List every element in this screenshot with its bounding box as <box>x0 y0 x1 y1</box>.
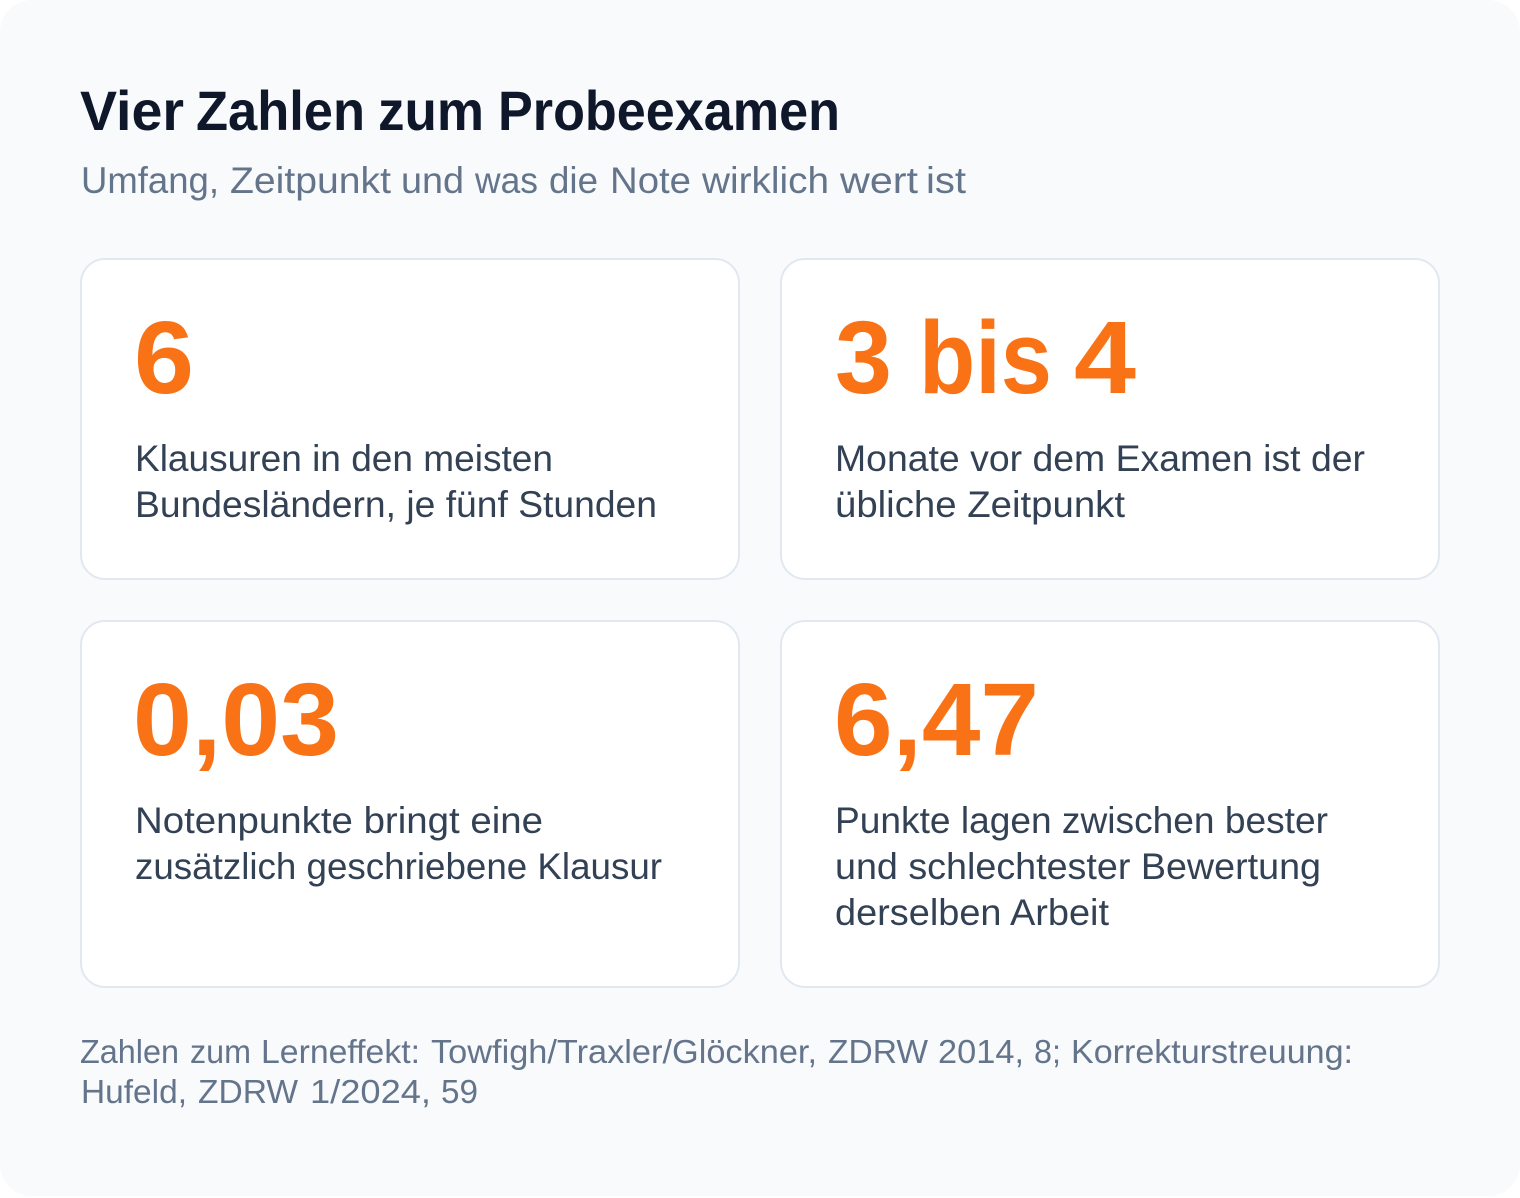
description: zusätzlich geschriebene Klausur <box>135 846 662 887</box>
panel: 6,47 Punkte <box>781 621 1439 987</box>
title: Probeexamen <box>498 79 840 142</box>
description: Klausuren in den meisten <box>135 438 553 479</box>
card background <box>81 621 739 987</box>
big number: 6: 6 <box>134 300 194 415</box>
description: derselben Arbeit <box>835 892 1110 933</box>
subtitle: Note <box>610 160 691 201</box>
source footnote: 8; <box>1034 1033 1061 1070</box>
big number: 0,03: 0,03 <box>133 662 339 777</box>
subtitle: die <box>549 160 598 201</box>
source footnote: 59 <box>441 1073 478 1110</box>
source footnote: Lerneffekt: <box>261 1033 420 1070</box>
card background <box>81 259 739 579</box>
panel: 6 Klausuren <box>81 259 739 579</box>
card background <box>781 259 1439 579</box>
source footnote: 1/2024, <box>310 1073 431 1110</box>
card background <box>781 621 1439 987</box>
source footnote: zum <box>190 1033 251 1070</box>
panel: 3 bis 4 Monate <box>781 259 1439 579</box>
big number: 3 bis 4: 3 <box>835 300 892 415</box>
title: Zahlen <box>196 79 365 142</box>
big number: 3 bis 4: bis <box>919 300 1052 415</box>
panel: 0,03 Notenpunkte <box>81 621 739 987</box>
subtitle: wert <box>839 160 919 201</box>
source footnote: Towfigh/Traxler/Glöckner, <box>431 1033 817 1070</box>
big number: 6,47: 6,47 <box>834 662 1039 777</box>
subtitle: ist <box>926 160 967 201</box>
big number: 3 bis 4: 4 <box>1074 300 1136 415</box>
source footnote: ZDRW <box>198 1073 299 1110</box>
subtitle: und <box>401 160 464 201</box>
title: zum <box>378 79 484 142</box>
description: Punkte lagen zwischen bester <box>835 800 1328 841</box>
description: übliche Zeitpunkt <box>835 484 1126 525</box>
source footnote: 2014, <box>938 1033 1024 1070</box>
description: Bundesländern, je fünf Stunden <box>135 484 657 525</box>
source footnote: Zahlen <box>80 1033 179 1070</box>
subtitle: was <box>474 160 538 201</box>
description: und schlechtester Bewertung <box>835 846 1321 887</box>
source footnote: Hufeld, <box>81 1073 187 1110</box>
description: Notenpunkte bringt eine <box>135 800 543 841</box>
title: Vier <box>80 79 184 142</box>
subtitle: wirklich <box>701 160 829 201</box>
source footnote: ZDRW <box>828 1033 929 1070</box>
description: Monate vor dem Examen ist der <box>835 438 1365 479</box>
source footnote: Korrekturstreuung: <box>1071 1033 1353 1070</box>
subtitle: Umfang, <box>81 160 219 201</box>
subtitle: Zeitpunkt <box>230 160 392 201</box>
